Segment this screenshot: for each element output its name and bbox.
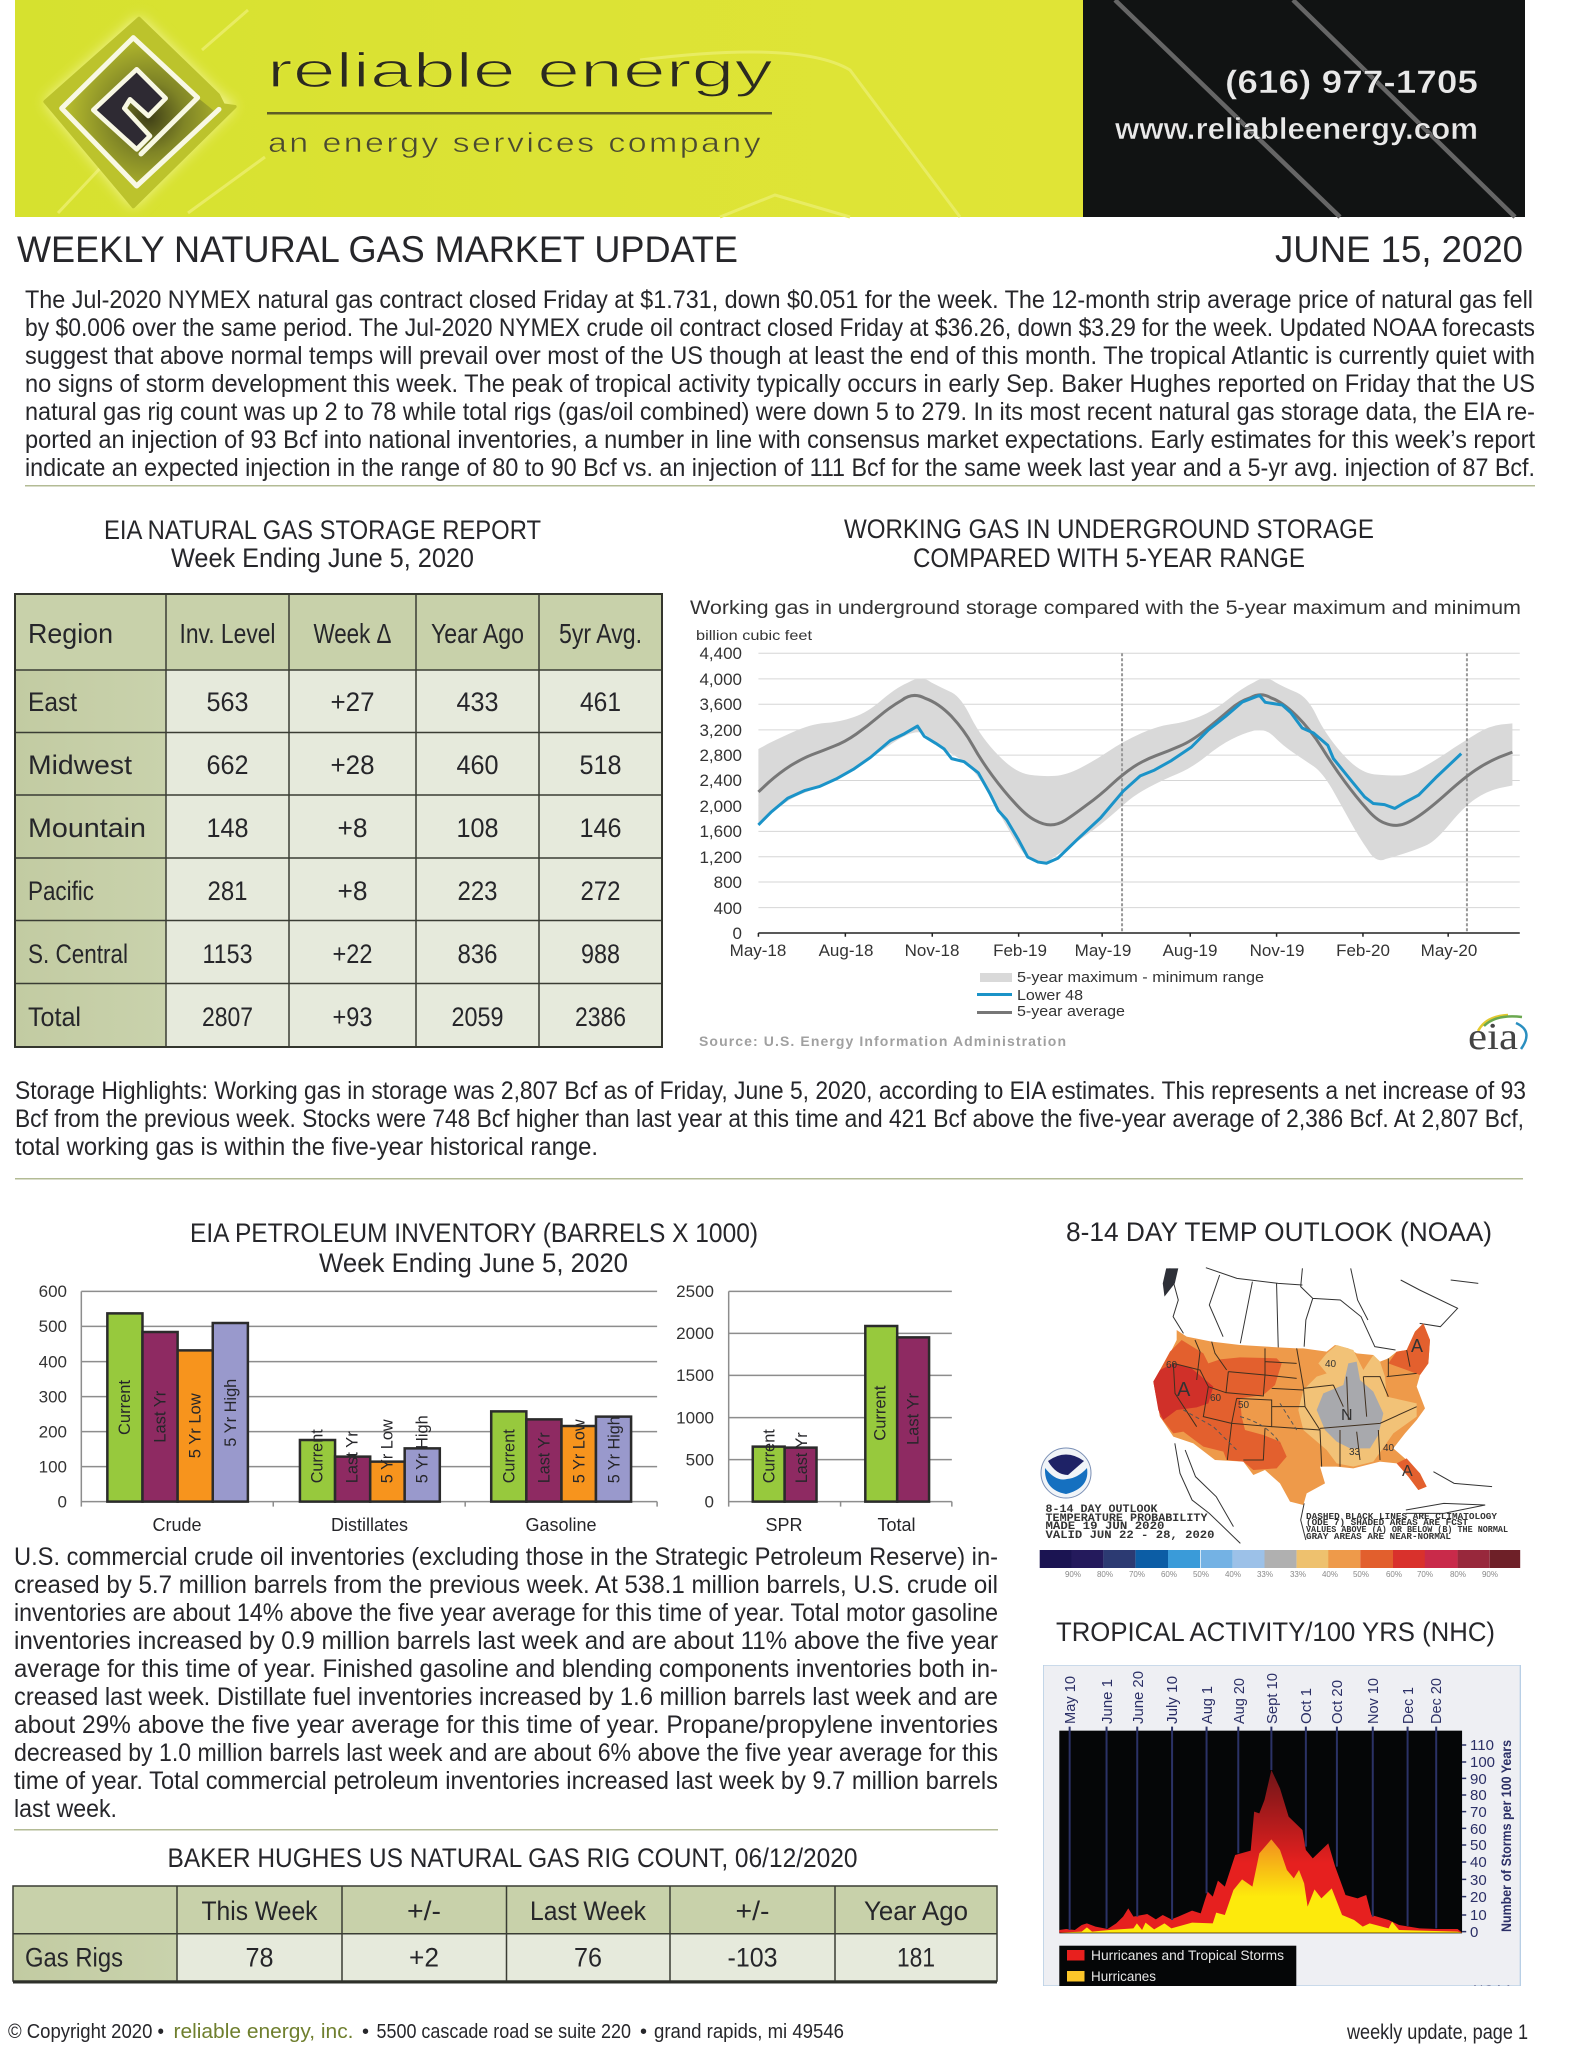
map: light orange region — [1298, 1345, 1417, 1467]
row: East: 563 — [206, 687, 248, 717]
color scale percent labels: 33% — [1257, 1570, 1273, 1579]
storm count axis labels: 60 — [1470, 1821, 1487, 1838]
bar chart: petroleum inventory — [39, 1282, 952, 1535]
category labels: Gasoline — [525, 1515, 597, 1535]
table header row: Inv. Level — [180, 618, 276, 649]
left axis labels: 500 — [39, 1317, 67, 1336]
table header row — [28, 618, 642, 649]
petroleum commentary paragraph — [14, 1543, 998, 1823]
row: Midwest: Midwest — [28, 750, 133, 780]
storage highlights paragraph — [15, 1077, 1526, 1161]
heading: tropical activity: TROPICAL ACTIVITY/100 YRS (NHC) — [1056, 1617, 1495, 1647]
heading: working gas chart — [844, 514, 1374, 573]
map caption: outlook dates: 8-14 DAY OUTLOOK — [1046, 1504, 1158, 1516]
map probability labels: 50 — [1238, 1400, 1250, 1411]
map: NOAA 8-14 day temperature outlook — [1040, 1268, 1520, 1579]
table header row: Region — [28, 618, 113, 649]
black plot area — [1059, 1731, 1462, 1933]
chart subtitle: Working gas in underground storage compared with the 5-year maximum and minimum — [690, 598, 1521, 619]
NOAA credit: NOAA — [1473, 1982, 1514, 1998]
bar value labels: 5 Yr High — [221, 1379, 240, 1447]
category labels — [152, 1515, 916, 1535]
map probability labels — [1166, 1359, 1395, 1458]
petroleum commentary paragraph: decreased by 1.0 million barrels last week and are about 6% above the five year average for this — [14, 1739, 998, 1767]
chart legend: 5-year average — [1017, 1003, 1125, 1020]
x axis labels: Nov-18 — [905, 941, 959, 960]
map anomaly letters: N — [1341, 1407, 1353, 1424]
unit label: billion cubic feet — [696, 627, 812, 643]
map anomaly letters: A — [1411, 1336, 1423, 1356]
heading: temperature outlook: 8-14 DAY TEMP OUTLOOK (NOAA) — [1066, 1217, 1492, 1247]
row: Total: 2059 — [452, 1002, 504, 1032]
color scale percent labels: 50% — [1353, 1570, 1369, 1579]
bars: distillates — [300, 1440, 440, 1502]
footer: copyright and address: reliable energy, inc. — [174, 2021, 354, 2043]
storm count axis labels: 70 — [1470, 1804, 1487, 1821]
left axis labels: 300 — [39, 1388, 67, 1406]
map probability labels: 40 — [1383, 1443, 1395, 1454]
date: JUNE 15, 2020 — [1275, 229, 1523, 270]
date labels: Oct 20 — [1329, 1680, 1346, 1724]
y axis labels: 1,200 — [699, 848, 742, 867]
bar value labels: 5 Yr High — [604, 1416, 624, 1483]
storage highlights paragraph: total working gas is within the five-year historical range. — [15, 1133, 598, 1161]
map: Canada, Mexico and Caribbean outlines — [1163, 1268, 1492, 1543]
x axis labels: Aug-18 — [819, 941, 873, 960]
map probability labels: 60 — [1210, 1393, 1222, 1404]
row: Pacific: Pacific — [28, 876, 94, 906]
petroleum commentary paragraph: creased last week. Distillate fuel inventories increased by 1.6 million barrels last week and are — [14, 1683, 998, 1711]
right axis labels: 1500 — [676, 1366, 714, 1385]
row: Midwest: 518 — [580, 750, 622, 780]
date labels: Aug 20 — [1231, 1678, 1248, 1724]
y axis labels: 1,600 — [699, 822, 742, 841]
right axis labels: 2000 — [676, 1324, 714, 1343]
map: state lines — [1173, 1340, 1417, 1467]
row: Mountain: 146 — [580, 813, 622, 843]
heading: EIA natural gas storage report — [104, 515, 541, 573]
x axis labels: Nov-19 — [1250, 941, 1304, 960]
map anomaly letters — [1177, 1336, 1423, 1480]
chart legend — [977, 969, 1264, 1020]
map: Florida region — [1397, 1458, 1427, 1490]
color scale percent labels: 60% — [1161, 1570, 1177, 1579]
right axis labels — [676, 1282, 714, 1512]
5-year range band — [758, 679, 1512, 863]
date labels: May 10 — [1062, 1676, 1079, 1724]
color scale percent labels — [1065, 1570, 1498, 1579]
rig table row: 76 — [574, 1943, 602, 1973]
map: red region — [1153, 1363, 1213, 1420]
color scale percent labels: 33% — [1290, 1570, 1306, 1579]
map caption: outlook dates — [1046, 1504, 1214, 1542]
map anomaly letters: A — [1402, 1463, 1413, 1480]
y axis labels: 2,800 — [699, 746, 742, 765]
website: www.reliableenergy.com — [1114, 111, 1478, 146]
heading: EIA natural gas storage report: EIA NATURAL GAS STORAGE REPORT — [104, 515, 541, 545]
color scale percent labels: 80% — [1450, 1570, 1466, 1579]
heading: petroleum inventory — [190, 1218, 758, 1278]
table: gas storage by region — [15, 594, 662, 1047]
map caption: key notes — [1306, 1512, 1508, 1542]
bar value labels — [115, 1379, 922, 1483]
x axis labels: May-19 — [1075, 941, 1131, 960]
y axis labels — [699, 644, 742, 943]
bar value labels: Current — [760, 1429, 778, 1483]
date labels — [1062, 1671, 1445, 1724]
row: Midwest — [28, 750, 622, 780]
brand rule — [267, 112, 772, 114]
color scale percent labels: 90% — [1482, 1570, 1498, 1579]
y axis labels: 400 — [714, 899, 742, 918]
bar value labels: 5 Yr Low — [378, 1419, 396, 1483]
rig table header: Last Week — [530, 1896, 646, 1926]
table header row: Week Δ — [314, 618, 392, 649]
row: Mountain — [28, 813, 622, 843]
map probability labels: 33 — [1349, 1447, 1361, 1458]
footer: copyright and address: © Copyright 2020 • — [8, 2021, 164, 2043]
petroleum commentary paragraph: inventories increased by 0.9 million barrels last week and are about 11% above the five year — [14, 1627, 998, 1655]
y axis labels: 2,400 — [699, 771, 742, 790]
color scale percent labels: 50% — [1193, 1570, 1209, 1579]
row: Midwest: 662 — [206, 750, 248, 780]
chart legend: Hurricanes — [1091, 1968, 1156, 1984]
chart panel background — [1043, 1665, 1520, 1986]
map probability labels: 60 — [1166, 1360, 1178, 1371]
row: East: +27 — [330, 687, 374, 717]
bar value labels: 5 Yr High — [412, 1415, 432, 1483]
storm count axis labels: 10 — [1470, 1907, 1487, 1924]
left axis labels: 400 — [39, 1352, 67, 1372]
row: S. Central: 836 — [458, 939, 498, 969]
tagline: an energy services company — [268, 127, 763, 158]
row: Pacific: 272 — [580, 876, 620, 906]
rig table header: +/- — [736, 1896, 770, 1926]
storm count axis labels: 40 — [1470, 1854, 1487, 1871]
bar value labels: Current — [499, 1429, 518, 1483]
5-year average line — [758, 695, 1512, 825]
color scale percent labels: 40% — [1322, 1570, 1338, 1579]
map: above-normal base region — [1153, 1323, 1430, 1505]
row: S. Central: 988 — [581, 939, 620, 969]
chart legend: 5-year maximum - minimum range — [1017, 969, 1264, 986]
category labels: SPR — [765, 1515, 803, 1535]
table: gas rig count — [13, 1886, 997, 1984]
left axis labels: 0 — [58, 1492, 67, 1512]
row: Mountain: 148 — [206, 813, 248, 843]
row: Mountain: Mountain — [28, 813, 146, 843]
table header row: 5yr Avg. — [559, 618, 642, 649]
bars: total — [865, 1326, 929, 1502]
y axis labels: 800 — [714, 873, 742, 892]
heading: EIA natural gas storage report: Week Ending June 5, 2020 — [171, 543, 474, 573]
storm count axis labels: 80 — [1470, 1787, 1487, 1804]
bar value labels: Last Yr — [534, 1432, 553, 1483]
row: S. Central: S. Central — [28, 939, 128, 969]
date labels: Dec 1 — [1400, 1687, 1417, 1724]
petroleum commentary paragraph: about 29% above the five year average for this time of year. Propane/propylene inventories — [14, 1711, 998, 1739]
petroleum commentary paragraph: inventories are about 14% above the five year average for this time of year. Total motor gasoline — [14, 1599, 998, 1627]
category labels: Total — [877, 1515, 916, 1535]
row: Pacific: 223 — [458, 876, 498, 906]
date labels: July 10 — [1164, 1676, 1181, 1724]
row: Total: Total — [28, 1002, 81, 1032]
hurricanes area — [1059, 1839, 1462, 1933]
bar value labels: Current — [870, 1385, 890, 1441]
line chart: working gas in storage — [690, 598, 1526, 1058]
bar value labels: Last Yr — [792, 1432, 811, 1483]
x axis labels: May-18 — [730, 941, 786, 960]
left axis labels — [39, 1282, 67, 1512]
map: dashed climatology lines — [1183, 1403, 1297, 1450]
row: East: 461 — [580, 687, 621, 717]
storms area — [1059, 1770, 1462, 1933]
map caption: outlook dates: MADE 19 JUN 2020 — [1046, 1521, 1164, 1533]
chart legend: Hurricanes and Tropical Storms — [1091, 1947, 1284, 1963]
color scale percent labels: 70% — [1129, 1570, 1145, 1579]
right axis labels: 1000 — [676, 1408, 714, 1428]
date labels: Aug 1 — [1199, 1686, 1216, 1724]
date labels: Dec 20 — [1428, 1678, 1445, 1724]
map caption: key notes: DASHED BLACK LINES ARE CLIMATOLOGY — [1306, 1512, 1498, 1522]
map caption: key notes: GRAY AREAS ARE NEAR-NORMAL — [1306, 1532, 1451, 1542]
y axis labels: 2,000 — [699, 797, 742, 816]
rig table row: +2 — [409, 1943, 439, 1973]
map caption: outlook dates: VALID JUN 22 - 28, 2020 — [1046, 1530, 1214, 1542]
table header row: Year Ago — [431, 618, 524, 649]
row: S. Central: +22 — [332, 939, 372, 969]
bar value labels: Current — [115, 1380, 134, 1435]
x axis labels: Feb-20 — [1336, 941, 1390, 960]
x axis labels: May-20 — [1421, 941, 1477, 960]
phone number: (616) 977-1705 — [1225, 64, 1478, 100]
bars: crude — [107, 1313, 248, 1502]
row: Pacific: +8 — [338, 876, 368, 906]
row: Mountain: 108 — [456, 813, 498, 843]
storm count axis labels: 20 — [1470, 1889, 1487, 1906]
y axis labels: 4,400 — [699, 644, 742, 663]
row: Pacific: 281 — [208, 876, 248, 906]
rig table row: 78 — [246, 1943, 274, 1973]
map: dark orange region — [1153, 1340, 1287, 1470]
chart: tropical activity — [1043, 1665, 1520, 1998]
storm count axis labels: 30 — [1470, 1872, 1487, 1889]
row: S. Central: 1153 — [202, 939, 252, 969]
color scale percent labels: 70% — [1417, 1570, 1433, 1579]
map anomaly letters: A — [1177, 1379, 1191, 1401]
petroleum commentary paragraph: average for this time of year. Finished gasoline and blending components inventories both in- — [14, 1655, 998, 1683]
storm count axis labels: 50 — [1470, 1837, 1487, 1854]
x axis labels: Aug-19 — [1163, 941, 1217, 960]
rig table row: Gas Rigs — [25, 1943, 123, 1973]
left axis labels: 100 — [39, 1458, 67, 1476]
rig table header — [202, 1896, 968, 1926]
color scale percent labels: 90% — [1065, 1570, 1081, 1579]
row: Mountain: +8 — [338, 813, 368, 843]
icon: eia logo: eia — [1468, 1016, 1518, 1058]
icon: spiral diamond logo — [45, 17, 235, 207]
brand name: reliable energy — [267, 44, 774, 98]
map: near-normal gray region — [1317, 1362, 1383, 1448]
contact panel — [1083, 0, 1525, 217]
map probability labels: 40 — [1325, 1359, 1337, 1370]
row: S. Central — [28, 939, 620, 969]
right axis labels: 2500 — [676, 1282, 714, 1301]
row: East: 433 — [456, 687, 498, 717]
bar value labels: Last Yr — [150, 1390, 170, 1443]
left axis labels: 600 — [39, 1282, 67, 1301]
title: WEEKLY NATURAL GAS MARKET UPDATE — [17, 229, 738, 270]
storm count axis labels — [1470, 1737, 1495, 1941]
axis title: Number of Storms per 100 Years — [1498, 1740, 1514, 1932]
heading: petroleum inventory: Week Ending June 5, 2020 — [319, 1248, 628, 1278]
color scale percent labels: 60% — [1386, 1570, 1402, 1579]
petroleum commentary paragraph: last week. — [14, 1795, 117, 1823]
row: Pacific — [28, 876, 620, 906]
map color scale — [1040, 1550, 1520, 1579]
row: Total: 2386 — [575, 1002, 626, 1032]
color scale percent labels: 80% — [1097, 1570, 1113, 1579]
x axis labels — [730, 941, 1477, 960]
rig table row: -103 — [728, 1943, 778, 1973]
heading: working gas chart: WORKING GAS IN UNDERGROUND STORAGE — [844, 514, 1374, 544]
chart legend: Lower 48 — [1017, 987, 1083, 1004]
bars: gasoline — [491, 1411, 631, 1502]
rig table header: This Week — [202, 1896, 318, 1926]
row: East — [28, 687, 621, 717]
footer: copyright and address: 5500 cascade road se suite 220 — [376, 2021, 631, 2043]
row: Midwest: 460 — [456, 750, 498, 780]
map: northeast region — [1388, 1323, 1430, 1375]
date labels: Sept 10 — [1264, 1673, 1281, 1724]
row: Total — [28, 1002, 626, 1032]
heading: working gas chart: COMPARED WITH 5-YEAR RANGE — [913, 543, 1305, 573]
y axis labels: 0 — [733, 924, 742, 943]
petroleum commentary paragraph: U.S. commercial crude oil inventories (excluding those in the Strategic Petroleum Reserve) in- — [14, 1543, 998, 1571]
petroleum commentary paragraph: creased by 5.7 million barrels from the previous week. At 538.1 million barrels, U.S. crude oil — [14, 1571, 998, 1599]
bar value labels: Last Yr — [903, 1393, 922, 1445]
rig table row — [25, 1943, 935, 1973]
source note: Source: U.S. Energy Information Administration — [699, 1033, 1066, 1049]
footer: copyright and address: • — [640, 2021, 647, 2043]
storm count axis labels: 0 — [1470, 1924, 1478, 1941]
y axis labels: 3,200 — [699, 721, 742, 740]
heading: Baker Hughes rig count: BAKER HUGHES US NATURAL GAS RIG COUNT, 06/12/2020 — [168, 1843, 858, 1873]
right axis labels: 0 — [705, 1492, 714, 1512]
bar value labels: Current — [307, 1429, 326, 1483]
bar value labels: Last Yr — [342, 1431, 362, 1483]
category labels: Crude — [152, 1515, 202, 1535]
header banner — [15, 0, 1525, 217]
right axis labels: 500 — [686, 1450, 714, 1470]
row: East: East — [28, 687, 77, 717]
heading: petroleum inventory: EIA PETROLEUM INVENTORY (BARRELS X 1000) — [190, 1218, 758, 1248]
left axis labels: 200 — [39, 1422, 67, 1442]
bar value labels: 5 Yr Low — [570, 1419, 588, 1483]
row: Total: +93 — [332, 1002, 372, 1032]
y axis labels: 4,000 — [699, 670, 742, 689]
x axis labels: Feb-19 — [993, 941, 1047, 960]
icon: NOAA seal — [1041, 1448, 1091, 1498]
storm count axis labels: 110 — [1470, 1737, 1494, 1754]
map caption: key notes: (ODE 7) SHADED AREAS ARE FCST — [1306, 1518, 1469, 1528]
storm count axis labels: 90 — [1470, 1771, 1487, 1788]
banner: lime logo panel — [15, 0, 1083, 217]
date labels: June 1 — [1099, 1679, 1116, 1724]
storm count axis labels: 100 — [1470, 1754, 1495, 1771]
row: Total: 2807 — [202, 1002, 253, 1032]
y axis labels: 3,600 — [699, 695, 742, 714]
rig table header: +/- — [407, 1896, 441, 1926]
footer: copyright and address — [8, 2021, 844, 2043]
rig table row: 181 — [897, 1943, 935, 1973]
date labels: June 20 — [1130, 1671, 1147, 1724]
map caption: outlook dates: TEMPERATURE PROBABILITY — [1046, 1513, 1208, 1525]
bar value labels: 5 Yr Low — [186, 1393, 205, 1458]
date labels: Oct 1 — [1298, 1688, 1315, 1724]
date labels: Nov 10 — [1365, 1678, 1382, 1724]
footer: page number: weekly update, page 1 — [1346, 2021, 1528, 2044]
row: Midwest: +28 — [330, 750, 374, 780]
footer: copyright and address: grand rapids, mi 49546 — [654, 2021, 844, 2043]
category labels: Distillates — [331, 1515, 408, 1535]
color scale percent labels: 40% — [1225, 1570, 1241, 1579]
lower 48 line — [758, 695, 1461, 863]
petroleum commentary paragraph: time of year. Total commercial petroleum inventories increased last week by 9.7 million barrels — [14, 1767, 998, 1795]
market summary paragraph — [25, 286, 1535, 482]
map caption: key notes: VALUES ABOVE (A) OR BELOW (B) THE NORMAL — [1306, 1525, 1508, 1535]
chart legend — [1059, 1946, 1296, 1986]
bars: SPR — [753, 1447, 817, 1502]
rig table header: Year Ago — [864, 1896, 968, 1926]
footer: copyright and address: • — [362, 2021, 369, 2043]
